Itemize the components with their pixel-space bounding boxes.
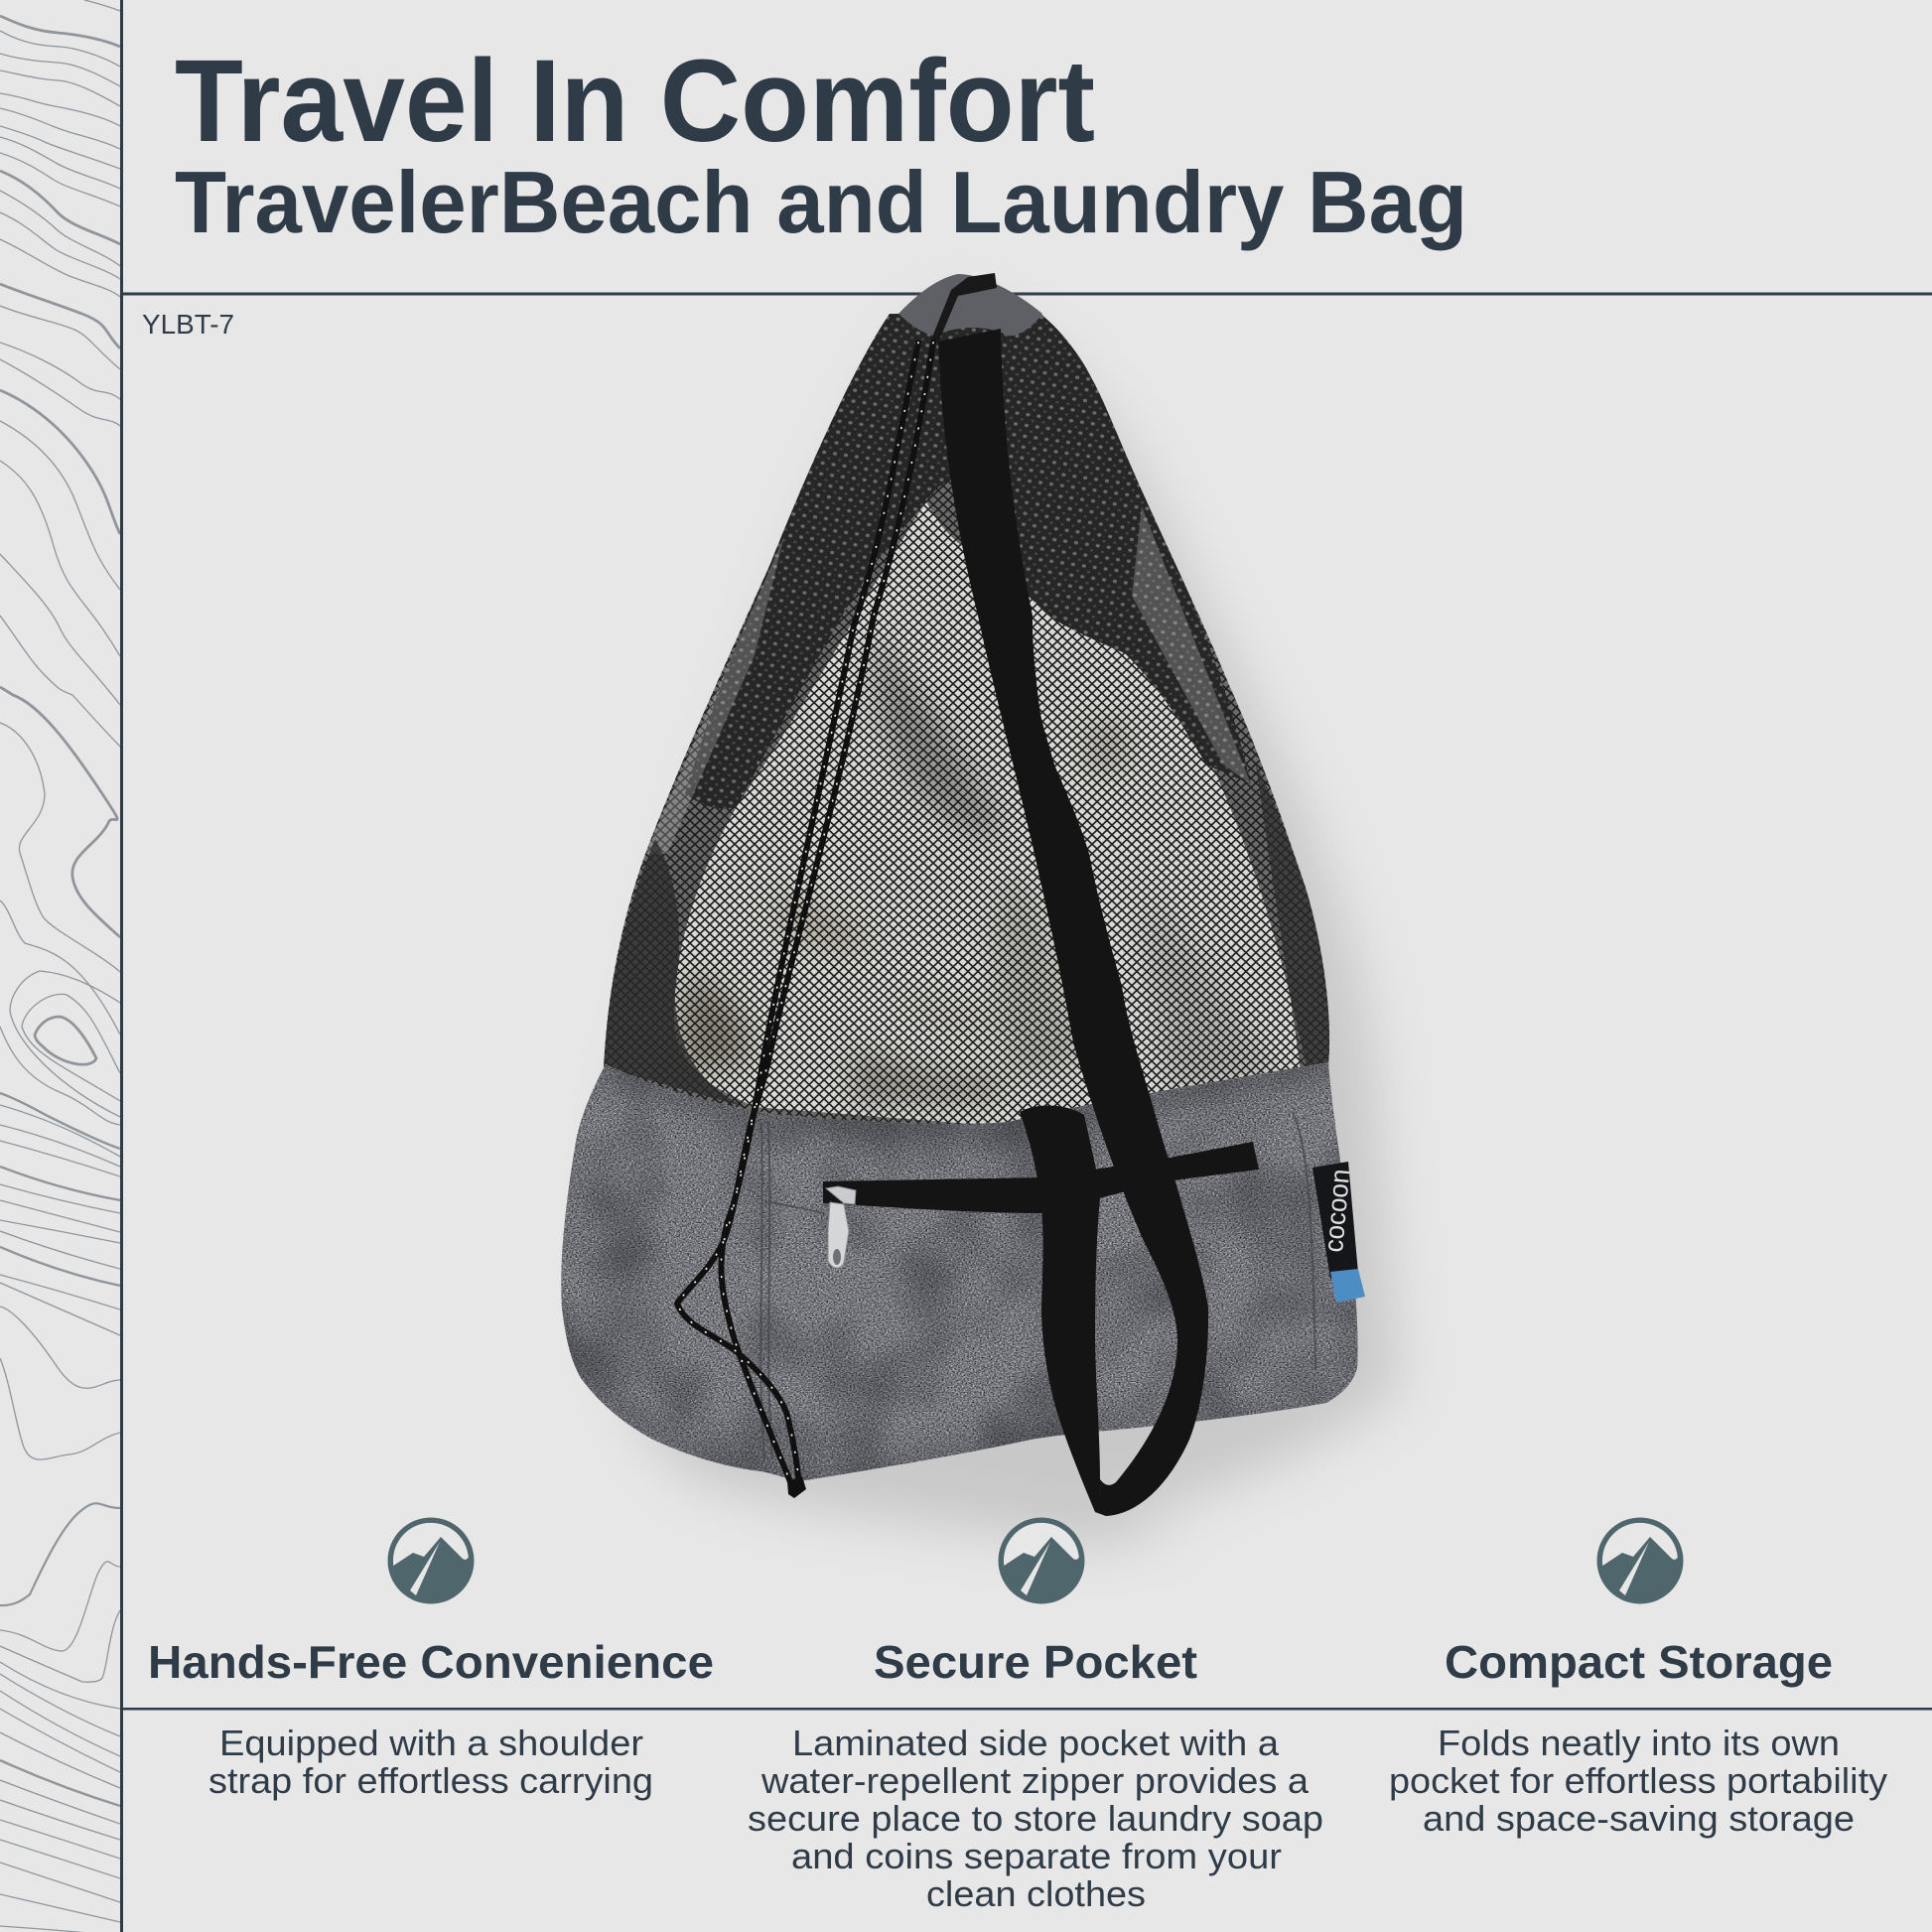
feature text 3: and space-saving storage bbox=[1423, 1798, 1855, 1839]
subtitle: TravelerBeach and Laundry Bag bbox=[175, 153, 1467, 251]
zipper pull bbox=[826, 1186, 856, 1268]
fabric edge shading bbox=[556, 1067, 1328, 1485]
strap: short rear band bbox=[1020, 1106, 1106, 1516]
brand label bbox=[1312, 1162, 1365, 1303]
feature text 1 bbox=[208, 1723, 653, 1801]
feature heading 1: Hands-Free Convenience bbox=[148, 1636, 714, 1688]
drawstring buckle bbox=[931, 273, 997, 343]
dark double-layer mesh at top bbox=[685, 314, 1251, 809]
feature text 1: Equipped with a shoulder bbox=[219, 1723, 643, 1763]
feature text 2: clean clothes bbox=[926, 1873, 1146, 1914]
feature rule bbox=[121, 1708, 1932, 1710]
feature text 3 bbox=[1389, 1723, 1887, 1839]
vertical rule bbox=[120, 0, 123, 1932]
pocket stitching bbox=[760, 1112, 1315, 1459]
feature heading 3: Compact Storage bbox=[1445, 1636, 1833, 1688]
grey fabric cap at top bbox=[898, 274, 1042, 336]
feature heading 2: Secure Pocket bbox=[874, 1636, 1197, 1688]
icon: mountain badge 1 bbox=[387, 1517, 475, 1604]
feature text 2: secure place to store laundry soap bbox=[748, 1798, 1323, 1839]
icon: mountain badge 3 bbox=[1596, 1517, 1684, 1604]
laundry inside the mesh bbox=[674, 501, 1309, 1127]
lighter outer edge of mesh, left bbox=[645, 536, 784, 854]
product code: YLBT-7 bbox=[142, 309, 234, 340]
feature text 1: strap for effortless carrying bbox=[208, 1760, 653, 1801]
topographic contour strip bbox=[0, 0, 120, 1932]
title: Travel In Comfort bbox=[175, 36, 1095, 167]
dark lower-left mesh shading bbox=[604, 839, 745, 1107]
lower-right mesh shading bbox=[1256, 764, 1329, 1072]
header rule bbox=[121, 292, 1932, 296]
feature text 2: water-repellent zipper provides a bbox=[760, 1760, 1310, 1801]
strap: long front band bbox=[938, 329, 1208, 1516]
shoulder strap bbox=[938, 329, 1208, 1516]
feature text 3: pocket for effortless portability bbox=[1389, 1760, 1887, 1801]
feature text 2: Laminated side pocket with a bbox=[792, 1723, 1280, 1763]
icon: mountain badge 2 bbox=[999, 1517, 1084, 1604]
lighter outer edge of mesh, right bbox=[1132, 506, 1251, 784]
feature text 3: Folds neatly into its own bbox=[1438, 1723, 1840, 1763]
feature text 2 bbox=[748, 1723, 1323, 1914]
bag drop shadow bbox=[612, 308, 1400, 1549]
side pocket zipper bbox=[823, 1142, 1259, 1213]
cord end knot bbox=[787, 1476, 806, 1498]
mesh upper body bbox=[586, 298, 1350, 1132]
single-layer mesh bbox=[586, 298, 1350, 1132]
brand label: cocoon bbox=[1318, 1168, 1355, 1254]
feature text 2: and coins separate from your bbox=[791, 1836, 1282, 1876]
drawstring cord bbox=[677, 343, 933, 1489]
product photo: laundry bag bbox=[546, 273, 1400, 1549]
grey fabric lower body bbox=[561, 1062, 1358, 1481]
